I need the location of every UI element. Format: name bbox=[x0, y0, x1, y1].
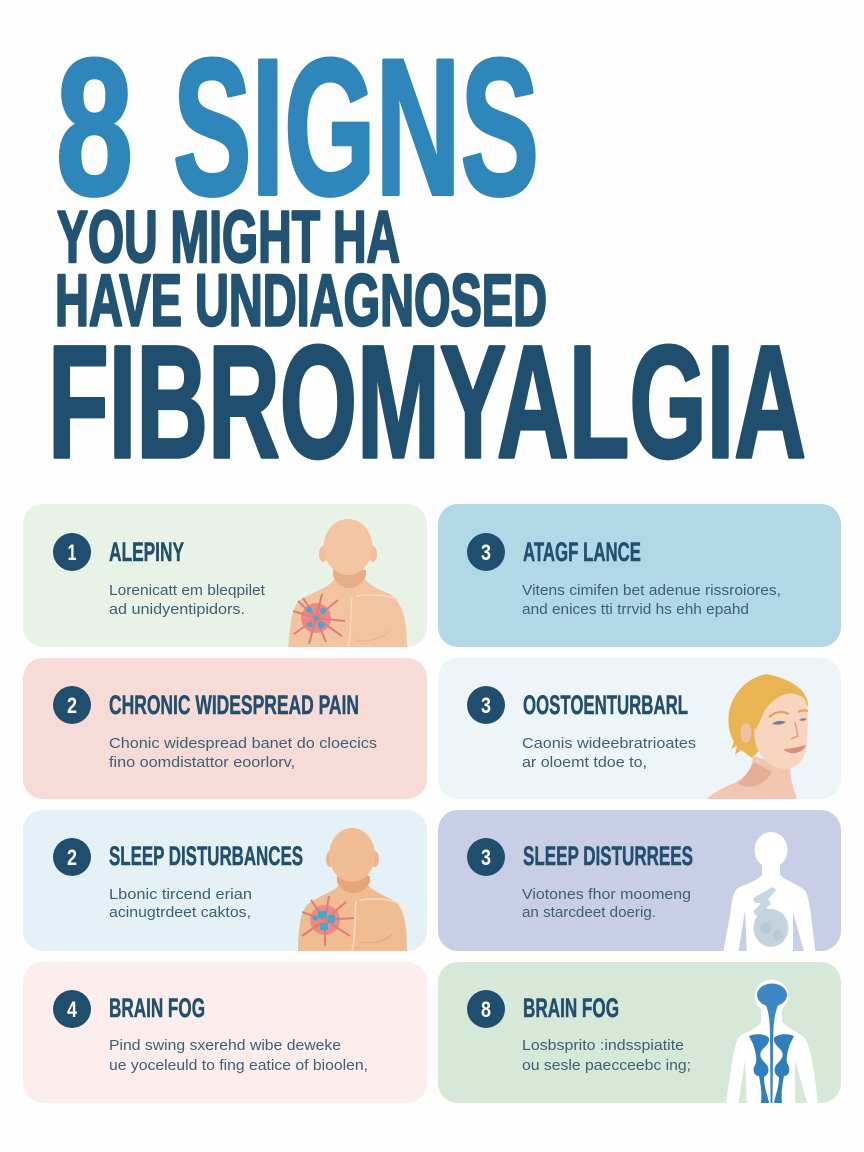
number badge 1 bbox=[53, 533, 91, 571]
number badge 2 bbox=[53, 838, 91, 876]
heading: brain fog: BRAIN FOG bbox=[523, 993, 619, 1023]
description: ou sesle paecceebc ing; bbox=[522, 1057, 691, 1074]
description: Lbonic tircend erian bbox=[109, 886, 252, 903]
panel: sleep disturbances bbox=[23, 810, 427, 955]
number badge 3 bbox=[467, 533, 505, 571]
number badge 2: 2 bbox=[67, 845, 77, 870]
number badge 8: 8 bbox=[481, 997, 491, 1022]
description: Lorenicatt em bleqpilet bbox=[109, 582, 266, 599]
title line: signs: SIGNS bbox=[173, 19, 539, 236]
heading: brain fog: BRAIN FOG bbox=[109, 993, 205, 1023]
heading: alepiny: ALEPINY bbox=[109, 537, 184, 567]
heading: sleep disturbances: SLEEP DISTURBANCES bbox=[109, 841, 303, 871]
number badge 8 bbox=[467, 990, 505, 1028]
description bbox=[109, 735, 377, 771]
description: ar oloemt tdoe to, bbox=[522, 754, 647, 771]
title bbox=[48, 19, 806, 491]
number badge 3 bbox=[467, 686, 505, 724]
description: Caonis wideebratrioates bbox=[522, 735, 696, 752]
description: acinugtrdeet caktos, bbox=[109, 904, 251, 921]
number badge 4: 4 bbox=[67, 997, 78, 1022]
heading: atagf lance: ATAGF LANCE bbox=[523, 537, 641, 567]
panel: brain fog bbox=[438, 962, 841, 1106]
number badge 2: 2 bbox=[67, 693, 77, 718]
description: an starcdeet doerig. bbox=[522, 904, 656, 921]
panel: atagf lance bbox=[438, 504, 841, 647]
description bbox=[522, 582, 781, 618]
description: ad unidyentipidors. bbox=[109, 601, 245, 618]
description bbox=[109, 582, 266, 618]
description: Vitens cimifen bet adenue rissroiores, bbox=[522, 582, 781, 599]
panel: sleep disturrees bbox=[438, 810, 841, 955]
illustration: torso with pain spot bbox=[298, 828, 407, 955]
illustration: torso with pain spot bbox=[288, 519, 407, 650]
heading: sleep disturrees: SLEEP DISTURREES bbox=[523, 841, 693, 871]
number badge 3: 3 bbox=[481, 693, 491, 718]
description: and enices tti trrvid hs ehh epahd bbox=[522, 601, 749, 618]
heading: chronic widespread pain: CHRONIC WIDESPREAD PAIN bbox=[109, 690, 359, 720]
description: Viotones fhor moomeng bbox=[522, 886, 691, 903]
number badge 2 bbox=[53, 686, 91, 724]
number badge 3: 3 bbox=[481, 845, 491, 870]
description: Losbsprito :indsspiatite bbox=[522, 1037, 684, 1054]
illustration: white silhouette with nervous system bbox=[726, 980, 818, 1106]
illustration: white silhouette with organ bbox=[723, 832, 816, 955]
description bbox=[522, 735, 696, 771]
number badge 3: 3 bbox=[481, 540, 491, 565]
panel: oostoenturbarl bbox=[438, 658, 841, 802]
panel: chronic widespread pain bbox=[23, 658, 427, 799]
description: Chonic widespread banet do cloecics bbox=[109, 735, 377, 752]
title line: 8: 8 bbox=[56, 19, 133, 236]
number badge 1: 1 bbox=[68, 540, 76, 565]
description bbox=[109, 886, 252, 921]
description bbox=[522, 886, 691, 921]
heading: oostoenturbarl: OOSTOENTURBARL bbox=[523, 690, 688, 720]
number badge 4 bbox=[53, 990, 91, 1028]
title line: you might ha: YOU MIGHT HA bbox=[57, 197, 400, 278]
description: Pind swing sxerehd wibe deweke bbox=[109, 1037, 341, 1054]
description: fino oomdistattor eoorlorv, bbox=[109, 754, 295, 771]
title line: have undiagnosed: HAVE UNDIAGNOSED bbox=[55, 260, 547, 342]
panel: brain fog bbox=[23, 962, 427, 1103]
description: ue yoceleuld to fing eatice of bioolen, bbox=[109, 1057, 368, 1074]
number badge 3 bbox=[467, 838, 505, 876]
description bbox=[109, 1037, 368, 1074]
panel: alepiny bbox=[23, 504, 427, 650]
description bbox=[522, 1037, 691, 1074]
illustration: woman's face in discomfort bbox=[704, 674, 808, 802]
